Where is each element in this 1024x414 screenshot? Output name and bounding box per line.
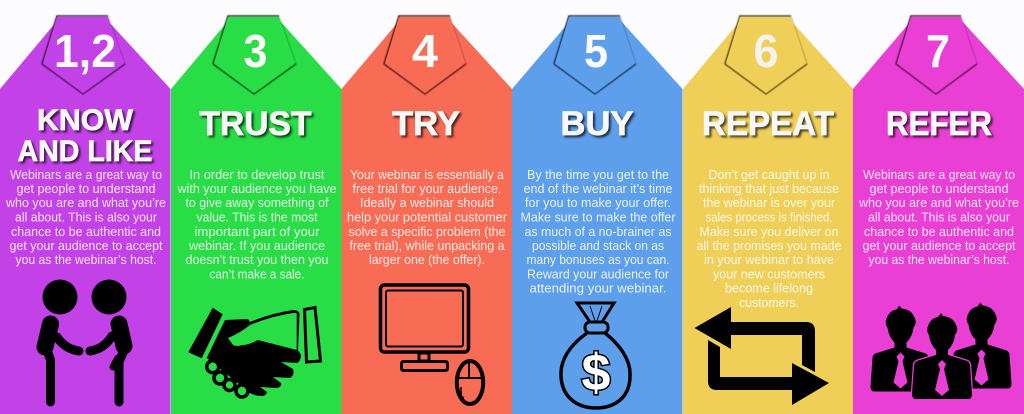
body text: trust: with your audience you have [177,181,336,196]
body text: try [347,167,508,267]
body text: repeat: in your webinar to have [704,252,834,267]
body text: know and like: get people to understand [16,181,156,196]
body text: repeat: Make sure you deliver on [700,224,838,239]
body text: trust: value. This is the most [196,210,318,224]
body text: buy: By the time you get to the [527,167,669,182]
heading: know and like [18,104,152,168]
body text: trust: can’t make a sale. [210,266,304,282]
body text: try: solve a specific problem (the [348,224,506,239]
body text: repeat: the webinar is over your [703,195,836,210]
panel: refer [853,16,1024,414]
body text: refer [858,167,1019,267]
body text: refer: get people to understand [870,181,1008,196]
body text: know and like: get your audience to accept [10,238,163,253]
body text: repeat: become lifelong [725,280,813,296]
body text: know and like: all about. This is also your [15,210,158,224]
pentagon badge: 3 [213,16,296,94]
pentagon badge: 3: 3 [244,25,268,77]
body text: know and like: you as the webinar’s host. [16,252,156,267]
pentagon badge: 5: 5 [584,25,608,77]
pentagon badge: 1,2: 1,2 [54,25,116,77]
body text: repeat: thinking that just because [699,181,839,196]
heading: trust: TRUST [200,105,312,143]
body text: trust [177,167,336,282]
body text: know and like: Webinars are a great way to [10,167,162,182]
heading: refer: REFER [886,105,992,143]
body text: trust: webinar. If you audience [188,238,325,253]
panel: repeat [683,16,853,414]
icon: two people shaking hands [42,280,126,402]
body text: try: Ideally a webinar should [360,195,494,210]
body text: buy: Reward your audience for [527,266,670,282]
body text: buy: as much of a no-brainer as [524,224,672,239]
body text: try: Your webinar is essentially a [350,167,505,182]
heading: know and like: KNOW [37,104,134,137]
pentagon badge: 4 [384,16,466,94]
body text: buy: many bonuses as you can. [526,252,670,267]
pentagon badge: 4: 4 [412,25,438,77]
panel: buy [512,16,682,414]
body text: repeat: all the promises you made [696,238,842,253]
body text: trust: to give away something of [186,195,329,210]
body text: trust: doesn’t trust you then you [186,252,328,267]
body text: repeat: sales process is finished. [705,210,833,225]
heading: know and like: AND LIKE [18,135,152,168]
body text: trust: In order to develop trust [190,167,325,182]
heading: buy: BUY [560,105,634,143]
panel: trust [171,16,342,414]
body text: try: help your potential customer [347,210,508,224]
body text: repeat: customers. [739,295,799,310]
body text: try: larger one (the offer). [369,252,485,267]
body text: trust: important part of your [194,224,320,239]
panel: try [342,16,512,414]
icon: money bag [561,303,630,408]
body text: buy: attending your webinar. [530,280,666,296]
body text: know and like: chance to be authentic and [11,224,161,239]
heading: repeat: REPEAT [702,105,834,143]
body text: know and like: who you are and what you’re [5,195,166,210]
pentagon badge: 6: 6 [754,25,778,77]
body text: refer: all about. This is also your [868,210,1011,224]
pentagon badge: 7: 7 [926,25,950,77]
body text: repeat: Don’t get caught up in [708,167,830,182]
body text: try: free trial for your audience. [352,181,502,196]
body text: buy: possible and stack on as [532,238,664,253]
icon: repeat arrows [694,307,829,405]
body text: repeat: your new customers [713,266,825,282]
body text: buy: for you to make your offer. [525,195,671,210]
body text: buy [520,167,676,296]
body text: refer: chance to be authentic and [864,224,1014,239]
body text: repeat [696,167,842,310]
body text: refer: you as the webinar’s host. [868,252,1010,267]
heading: try: TRY [392,105,460,143]
pentagon badge: 7 [896,16,977,94]
icon: three businessmen [870,302,1012,399]
body text: refer: get your audience to accept [862,238,1016,253]
body text: know and like [5,167,166,267]
pentagon badge: 6 [725,16,807,94]
body text: buy: end of the webinar it’s time [524,181,672,196]
pentagon badge: 1,2 [42,16,125,94]
body text: try: free trial), while unpacking a [350,238,505,253]
panel: know and like [0,16,170,414]
icon: handshake [188,308,320,397]
icon: money bag: $ [582,344,611,402]
body text: buy: Make sure to make the offer [520,210,676,224]
body text: refer: Webinars are a great way to [863,167,1015,182]
pentagon badge: 5 [554,16,636,94]
body text: refer: who you are and what you’re [858,195,1019,210]
icon: computer and mouse [380,285,483,404]
